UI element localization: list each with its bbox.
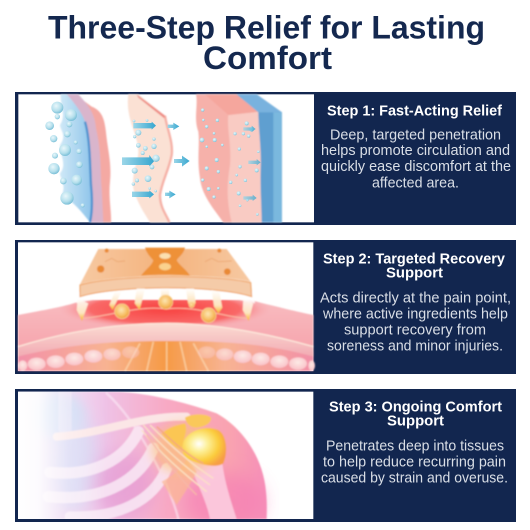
step 2 body: soreness and minor injuries. (327, 338, 503, 354)
step 1 body: affected area. (372, 175, 459, 191)
step 2 heading (323, 252, 506, 282)
step 2 body: Acts directly at the pain point, (320, 291, 511, 307)
panel: step 3 (15, 389, 516, 530)
step 3 body: Penetrates deep into tissues (326, 439, 504, 455)
step 1 body: Deep, targeted penetration (330, 127, 501, 143)
step 1 body: helps promote circulation and (321, 143, 510, 159)
illustration: glowing shoulder joint (18, 392, 313, 530)
title: Three-Step Relief for Lasting (48, 10, 485, 46)
step 2 body: where active ingredients help (322, 306, 508, 322)
step 3 body: caused by strain and overuse. (321, 471, 508, 487)
step 2 body (320, 291, 511, 354)
step 2 heading: Step 2: Targeted Recovery (323, 252, 506, 268)
penetrating rays (77, 288, 253, 321)
step 2 text (320, 252, 511, 354)
step 3 heading: Step 3: Ongoing Comfort (329, 400, 502, 416)
step 3 heading: Support (387, 414, 444, 430)
step 1 heading: Step 1: Fast-Acting Relief (327, 104, 502, 120)
step 1 body (321, 127, 511, 191)
illustration: skin layers absorbing droplets (18, 94, 314, 222)
step 2 body: support recovery from (344, 322, 486, 338)
arrows (122, 122, 261, 201)
panel: step 1 (15, 92, 516, 225)
step 2 heading: Support (386, 266, 443, 282)
fat layer (18, 337, 313, 371)
panel: step 2 (15, 240, 516, 374)
step 3 body (321, 439, 508, 487)
illustration: patch over skin (18, 242, 315, 371)
step 3 text (321, 400, 508, 487)
step 3 heading (329, 400, 502, 430)
title (48, 10, 485, 76)
step 1 text (321, 104, 511, 191)
step 3 body: to help reduce recurring pain (323, 454, 506, 470)
title: Comfort (203, 40, 332, 76)
step 1 body: quickly ease discomfort at the (321, 159, 511, 175)
droplets (45, 102, 260, 216)
